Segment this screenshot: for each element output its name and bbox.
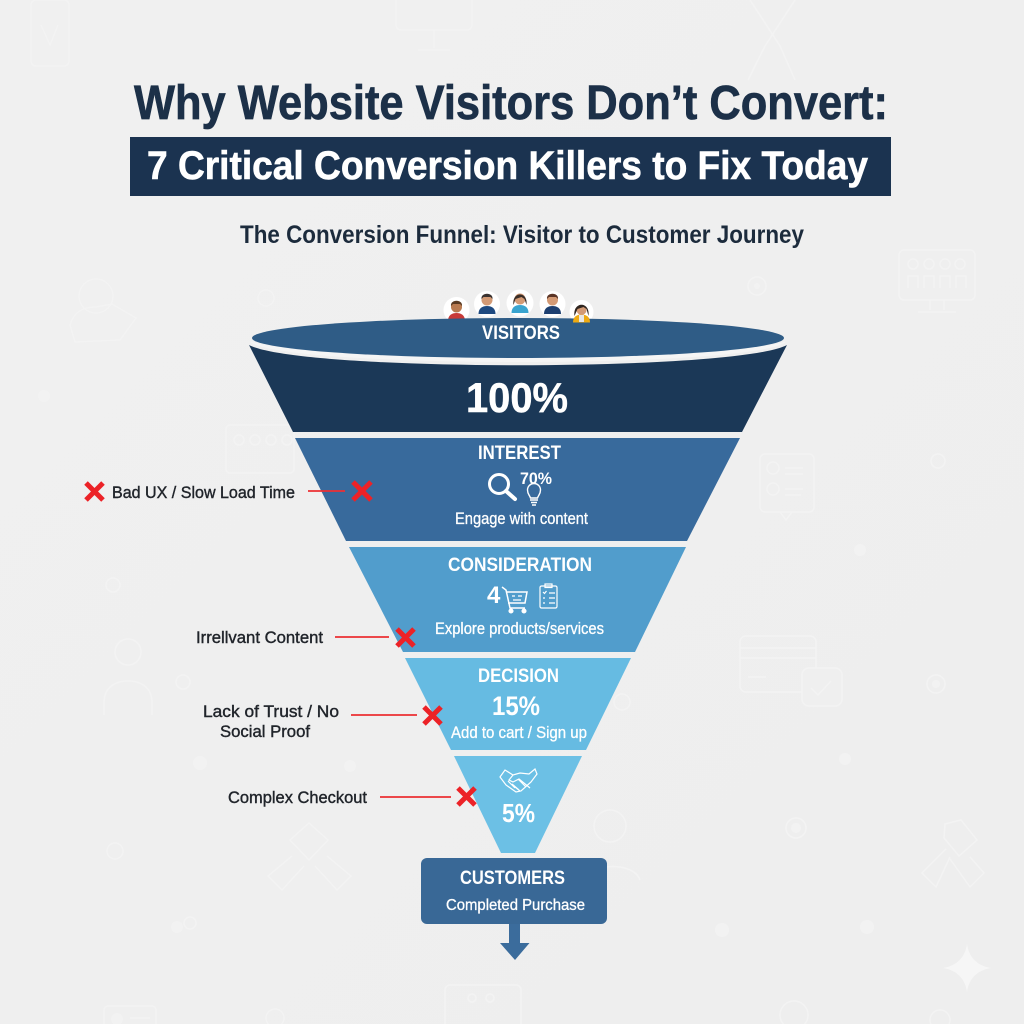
callout: complex checkout: Complex Checkout [228,788,367,807]
customers box: Completed Purchase [446,897,585,914]
funnel stage: purchase 5%: 5% [502,798,535,828]
callout: bad UX [86,482,371,502]
icon: magnifier [490,474,515,499]
callout: lack of trust [203,702,441,741]
funnel stage: consideration: 4 [487,582,501,609]
callout: bad UX: Bad UX / Slow Load Time [112,483,295,502]
icon: handshake [500,769,537,792]
funnel stage: visitors 100%: 100% [466,374,568,421]
funnel stage: consideration: Explore products/services [435,620,604,638]
icon: clipboard [540,584,557,608]
callout: lack of trust: Social Proof [220,722,310,741]
customers box: CUSTOMERS [460,868,565,889]
callout: complex checkout [228,788,475,807]
subtitle banner: 7 Critical Conversion Killers to Fix Today [147,144,869,188]
funnel stage: interest: Engage with content [455,510,588,528]
callout: irrelevant content [196,628,414,647]
funnel stage: decision [405,658,631,750]
customers box [421,858,607,960]
funnel stage: decision: DECISION [478,665,559,687]
funnel stage: purchase 5% [454,756,582,853]
callout: irrelevant content: Irrellvant Content [196,628,323,647]
decorative sparkle [943,944,991,992]
funnel stage: interest: 70% [520,469,552,488]
funnel stage: interest [295,438,740,541]
funnel stage: decision: 15% [492,691,540,721]
funnel stage: consideration: CONSIDERATION [448,554,592,576]
icon: shopping cart [502,587,527,613]
funnel stage: visitors 100% [249,318,787,432]
visitor avatars [444,290,594,324]
funnel [249,290,787,853]
funnel stage: decision: Add to cart / Sign up [451,724,587,742]
icon: light bulb [528,484,540,505]
title: Why Website Visitors Don’t Convert: [134,77,888,130]
avatar in front of rim [573,305,590,322]
funnel stage: interest: INTEREST [478,442,561,464]
funnel stage: consideration [349,547,686,652]
funnel stage: visitors 100%: VISITORS [482,323,560,344]
section heading: The Conversion Funnel: Visitor to Customer Journey [240,221,804,249]
callout: lack of trust: Lack of Trust / No [203,702,339,721]
